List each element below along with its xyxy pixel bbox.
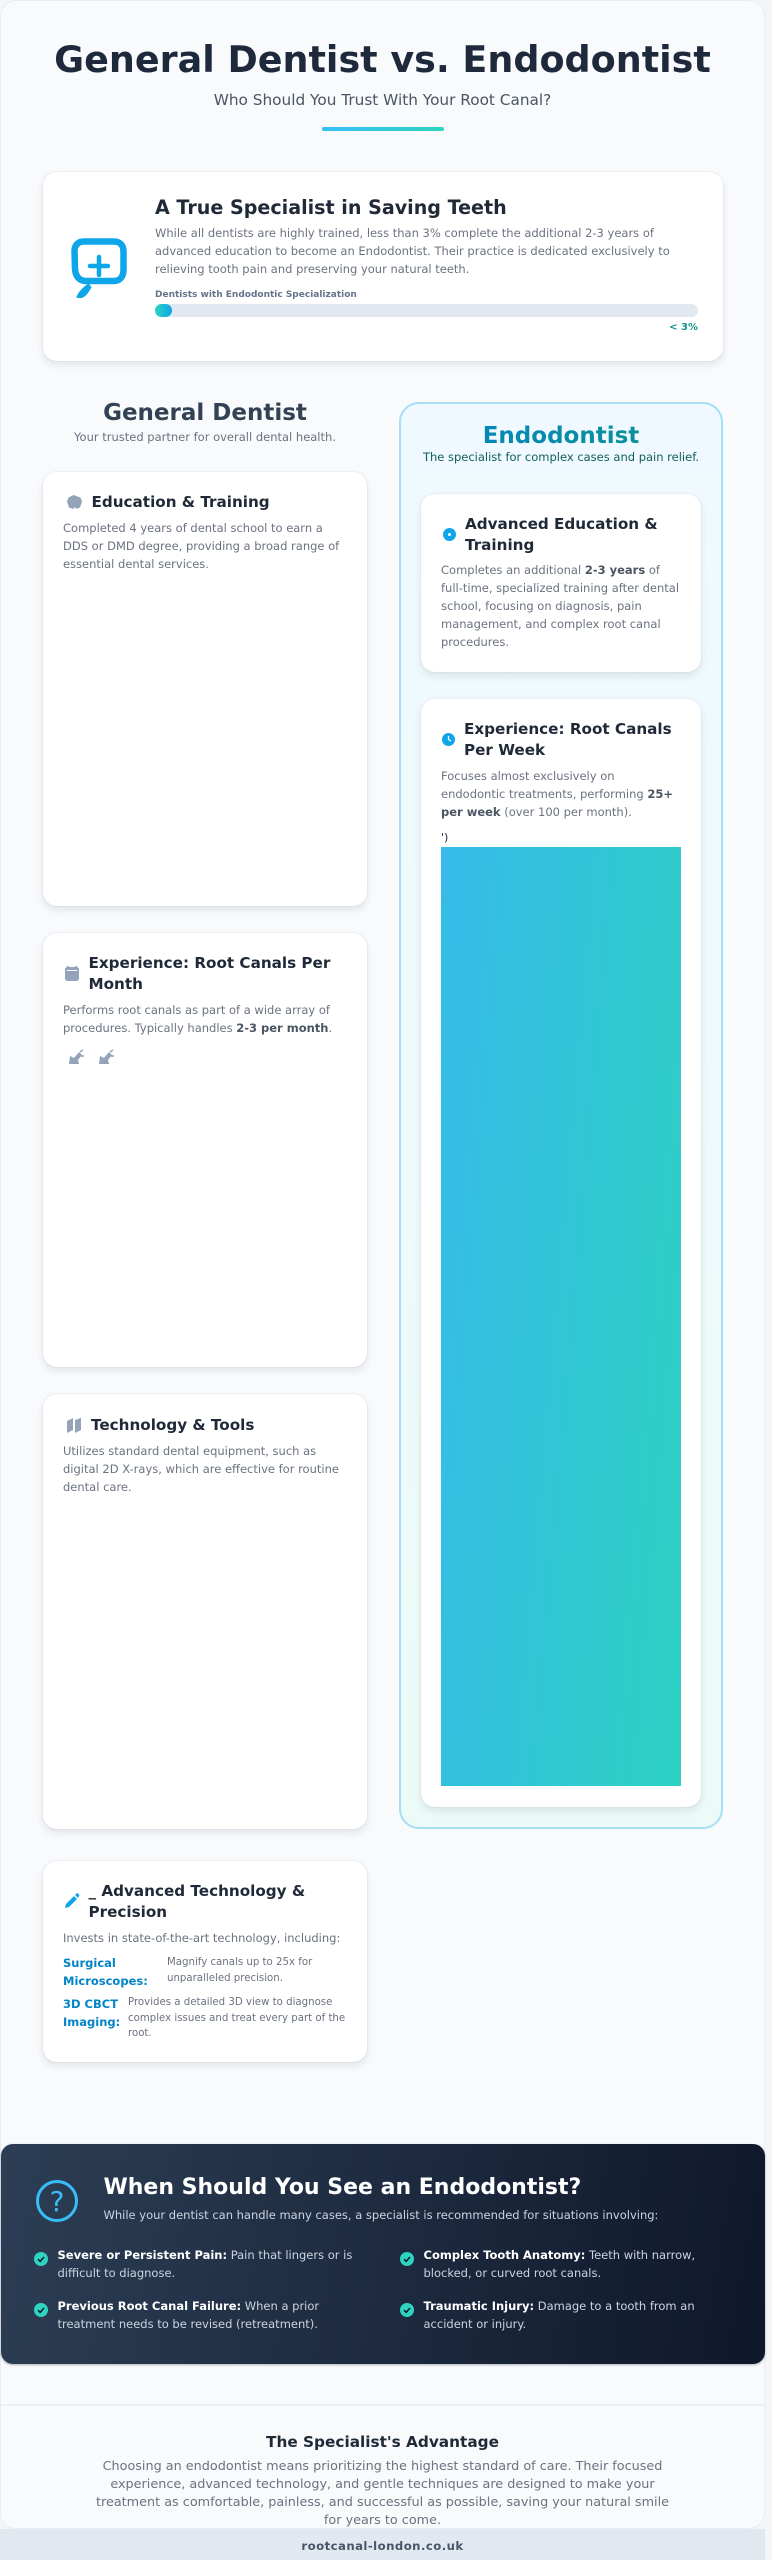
progress bar <box>155 304 698 317</box>
tagline: The specialist for complex cases and pain relief. <box>423 450 699 464</box>
body text: procedures. <box>441 635 509 649</box>
icon: clock <box>442 733 455 746</box>
heading: Endodontist <box>483 423 639 449</box>
body text: essential dental services. <box>63 557 209 571</box>
text <box>58 2299 320 2331</box>
term: microscopes <box>63 1956 148 1988</box>
heading: General Dentist <box>103 400 307 426</box>
icon: map <box>67 1418 81 1433</box>
heading: Month <box>88 974 143 992</box>
icon: check <box>400 2252 414 2266</box>
description: microscopes: unparalleled precision. <box>167 1972 283 1984</box>
text <box>424 2248 695 2280</box>
body text: treatment as comfortable, painless, and successful as possible, saving your natural smile <box>96 2495 669 2510</box>
icon: badge <box>443 528 456 541</box>
stray characters: ') <box>441 831 448 844</box>
body text <box>63 1444 339 1494</box>
item: anatomy <box>400 2248 695 2280</box>
footer text: rootcanal-london.co.uk <box>301 2539 464 2553</box>
panel: experience month <box>43 933 367 1367</box>
text: difficult to diagnose. <box>58 2266 175 2280</box>
header <box>54 38 711 131</box>
term: cbct: Imaging: <box>63 2015 120 2029</box>
heading: _ Advanced Technology & <box>88 1882 305 1900</box>
description: cbct: complex issues and treat every part of the <box>128 2012 345 2024</box>
accent underline <box>322 126 444 130</box>
icon: graduation <box>67 495 82 509</box>
body text: Completes an additional 2-3 years of <box>441 563 660 577</box>
icon: calendar <box>65 966 79 981</box>
body text: DDS or DMD degree, providing a broad range of <box>63 539 339 553</box>
card: experience week <box>421 699 701 1807</box>
body text <box>96 2459 669 2528</box>
body text: per week (over 100 per month). <box>441 805 632 819</box>
term: cbct <box>63 1997 120 2029</box>
body text: experience, advanced technology, and gentle techniques are designed to make your <box>110 2477 655 2492</box>
text: Traumatic Injury: Damage to a tooth from an <box>424 2299 695 2313</box>
panel: true specialist <box>43 172 723 361</box>
panel: advanced technology <box>43 1861 367 2062</box>
panel: education <box>43 472 367 906</box>
description: cbct <box>128 1997 345 2039</box>
item: injury <box>400 2299 695 2331</box>
text: treatment needs to be revised (retreatment). <box>58 2317 318 2331</box>
text: accident or injury. <box>424 2317 526 2331</box>
text: Previous Root Canal Failure: When a prior <box>58 2299 319 2313</box>
term: cbct: 3D CBCT <box>63 1997 118 2011</box>
column heading: general dentist <box>74 400 336 444</box>
heading: Experience: Root Canals Per <box>88 954 330 972</box>
text: Severe or Persistent Pain: Pain that lingers or is <box>58 2248 352 2262</box>
text: Complex Tooth Anatomy: Teeth with narrow, <box>424 2248 695 2262</box>
heading: Education & Training <box>92 493 270 511</box>
panel: endodontist <box>399 402 723 1829</box>
text <box>424 2299 695 2331</box>
body text: Performs root canals as part of a wide array of <box>63 1003 330 1017</box>
icon: question <box>36 2180 78 2222</box>
body text <box>63 1003 332 1035</box>
body text: Focuses almost exclusively on <box>441 769 615 783</box>
heading: Technology & Tools <box>91 1416 254 1434</box>
body text <box>441 563 679 649</box>
gradient block <box>441 847 681 1786</box>
icon: check <box>34 2252 48 2266</box>
body text: Completed 4 years of dental school to earn a <box>63 521 323 535</box>
heading <box>88 954 330 992</box>
heading: A True Specialist in Saving Teeth <box>155 196 507 219</box>
heading: Precision <box>88 1902 167 1920</box>
term: microscopes: Surgical <box>63 1956 116 1970</box>
body text: While all dentists are highly trained, less than 3% complete the additional 2-3 years of <box>155 226 654 240</box>
body text: management, and complex root canal <box>441 617 661 631</box>
text: blocked, or curved root canals. <box>424 2266 601 2280</box>
heading: Training <box>465 536 534 554</box>
description: microscopes: Magnify canals up to 25x for <box>167 1957 312 1968</box>
heading <box>464 720 672 758</box>
icon: tooth chat <box>71 238 127 298</box>
panel: when to see endodontist <box>1 2144 765 2364</box>
description: microscopes <box>167 1957 312 1984</box>
item: pain <box>34 2248 352 2280</box>
heading <box>88 1882 305 1920</box>
icon: check <box>400 2303 414 2317</box>
body text: Choosing an endodontist means prioritizing the highest standard of care. Their focused <box>103 2459 662 2474</box>
heading: The Specialist's Advantage <box>266 2433 499 2451</box>
body text <box>155 226 670 276</box>
body text: relieving tooth pain and preserving your natural teeth. <box>155 262 469 276</box>
tagline: Your trusted partner for overall dental health. <box>74 430 336 444</box>
body text: dental care. <box>63 1480 132 1494</box>
body text: full-time, specialized training after dental <box>441 581 679 595</box>
body text <box>441 769 673 819</box>
heading <box>399 419 723 453</box>
item: failure <box>34 2299 320 2331</box>
term: microscopes: Microscopes: <box>63 1974 148 1988</box>
intro text: Invests in state-of-the-art technology, including: <box>63 1931 340 1945</box>
body text: school, focusing on diagnosis, pain <box>441 599 642 613</box>
description: cbct: Provides a detailed 3D view to diagnose <box>128 1997 332 2008</box>
body text: for years to come. <box>324 2513 441 2528</box>
stat label: Dentists with Endodontic Specialization <box>155 290 357 300</box>
body text <box>63 521 340 571</box>
progress fill <box>155 304 172 317</box>
body text: digital 2D X-rays, which are effective for routine <box>63 1462 339 1476</box>
icon: check <box>34 2303 48 2317</box>
heading: Per Week <box>464 740 545 758</box>
heading: Advanced Education & <box>465 515 658 533</box>
card: advanced education <box>421 494 701 672</box>
text <box>58 2248 352 2280</box>
icons: tooth marks <box>69 1050 114 1064</box>
icon: question: ? <box>50 2185 64 2218</box>
subtitle: Who Should You Trust With Your Root Canal? <box>214 91 551 109</box>
body text: endodontic treatments, performing 25+ <box>441 787 673 801</box>
heading <box>465 515 658 554</box>
body text: procedures. Typically handles 2-3 per month. <box>63 1021 332 1035</box>
panel: technology <box>43 1394 367 1829</box>
conclusion <box>96 2433 669 2528</box>
heading: Experience: Root Canals <box>464 720 672 738</box>
body text: advanced education to become an Endodontist. Their practice is dedicated exclusively to <box>155 244 670 258</box>
stat value: < 3% <box>669 322 698 333</box>
body text: Utilizes standard dental equipment, such as <box>63 1444 316 1458</box>
icon: pencil <box>65 1893 80 1908</box>
intro text: While your dentist can handle many cases, a specialist is recommended for situations involving: <box>104 2208 658 2222</box>
title: General Dentist vs. Endodontist <box>54 38 711 81</box>
description: cbct: root. <box>128 2028 152 2039</box>
footer bar <box>0 2529 765 2560</box>
heading: When Should You See an Endodontist? <box>104 2175 581 2200</box>
